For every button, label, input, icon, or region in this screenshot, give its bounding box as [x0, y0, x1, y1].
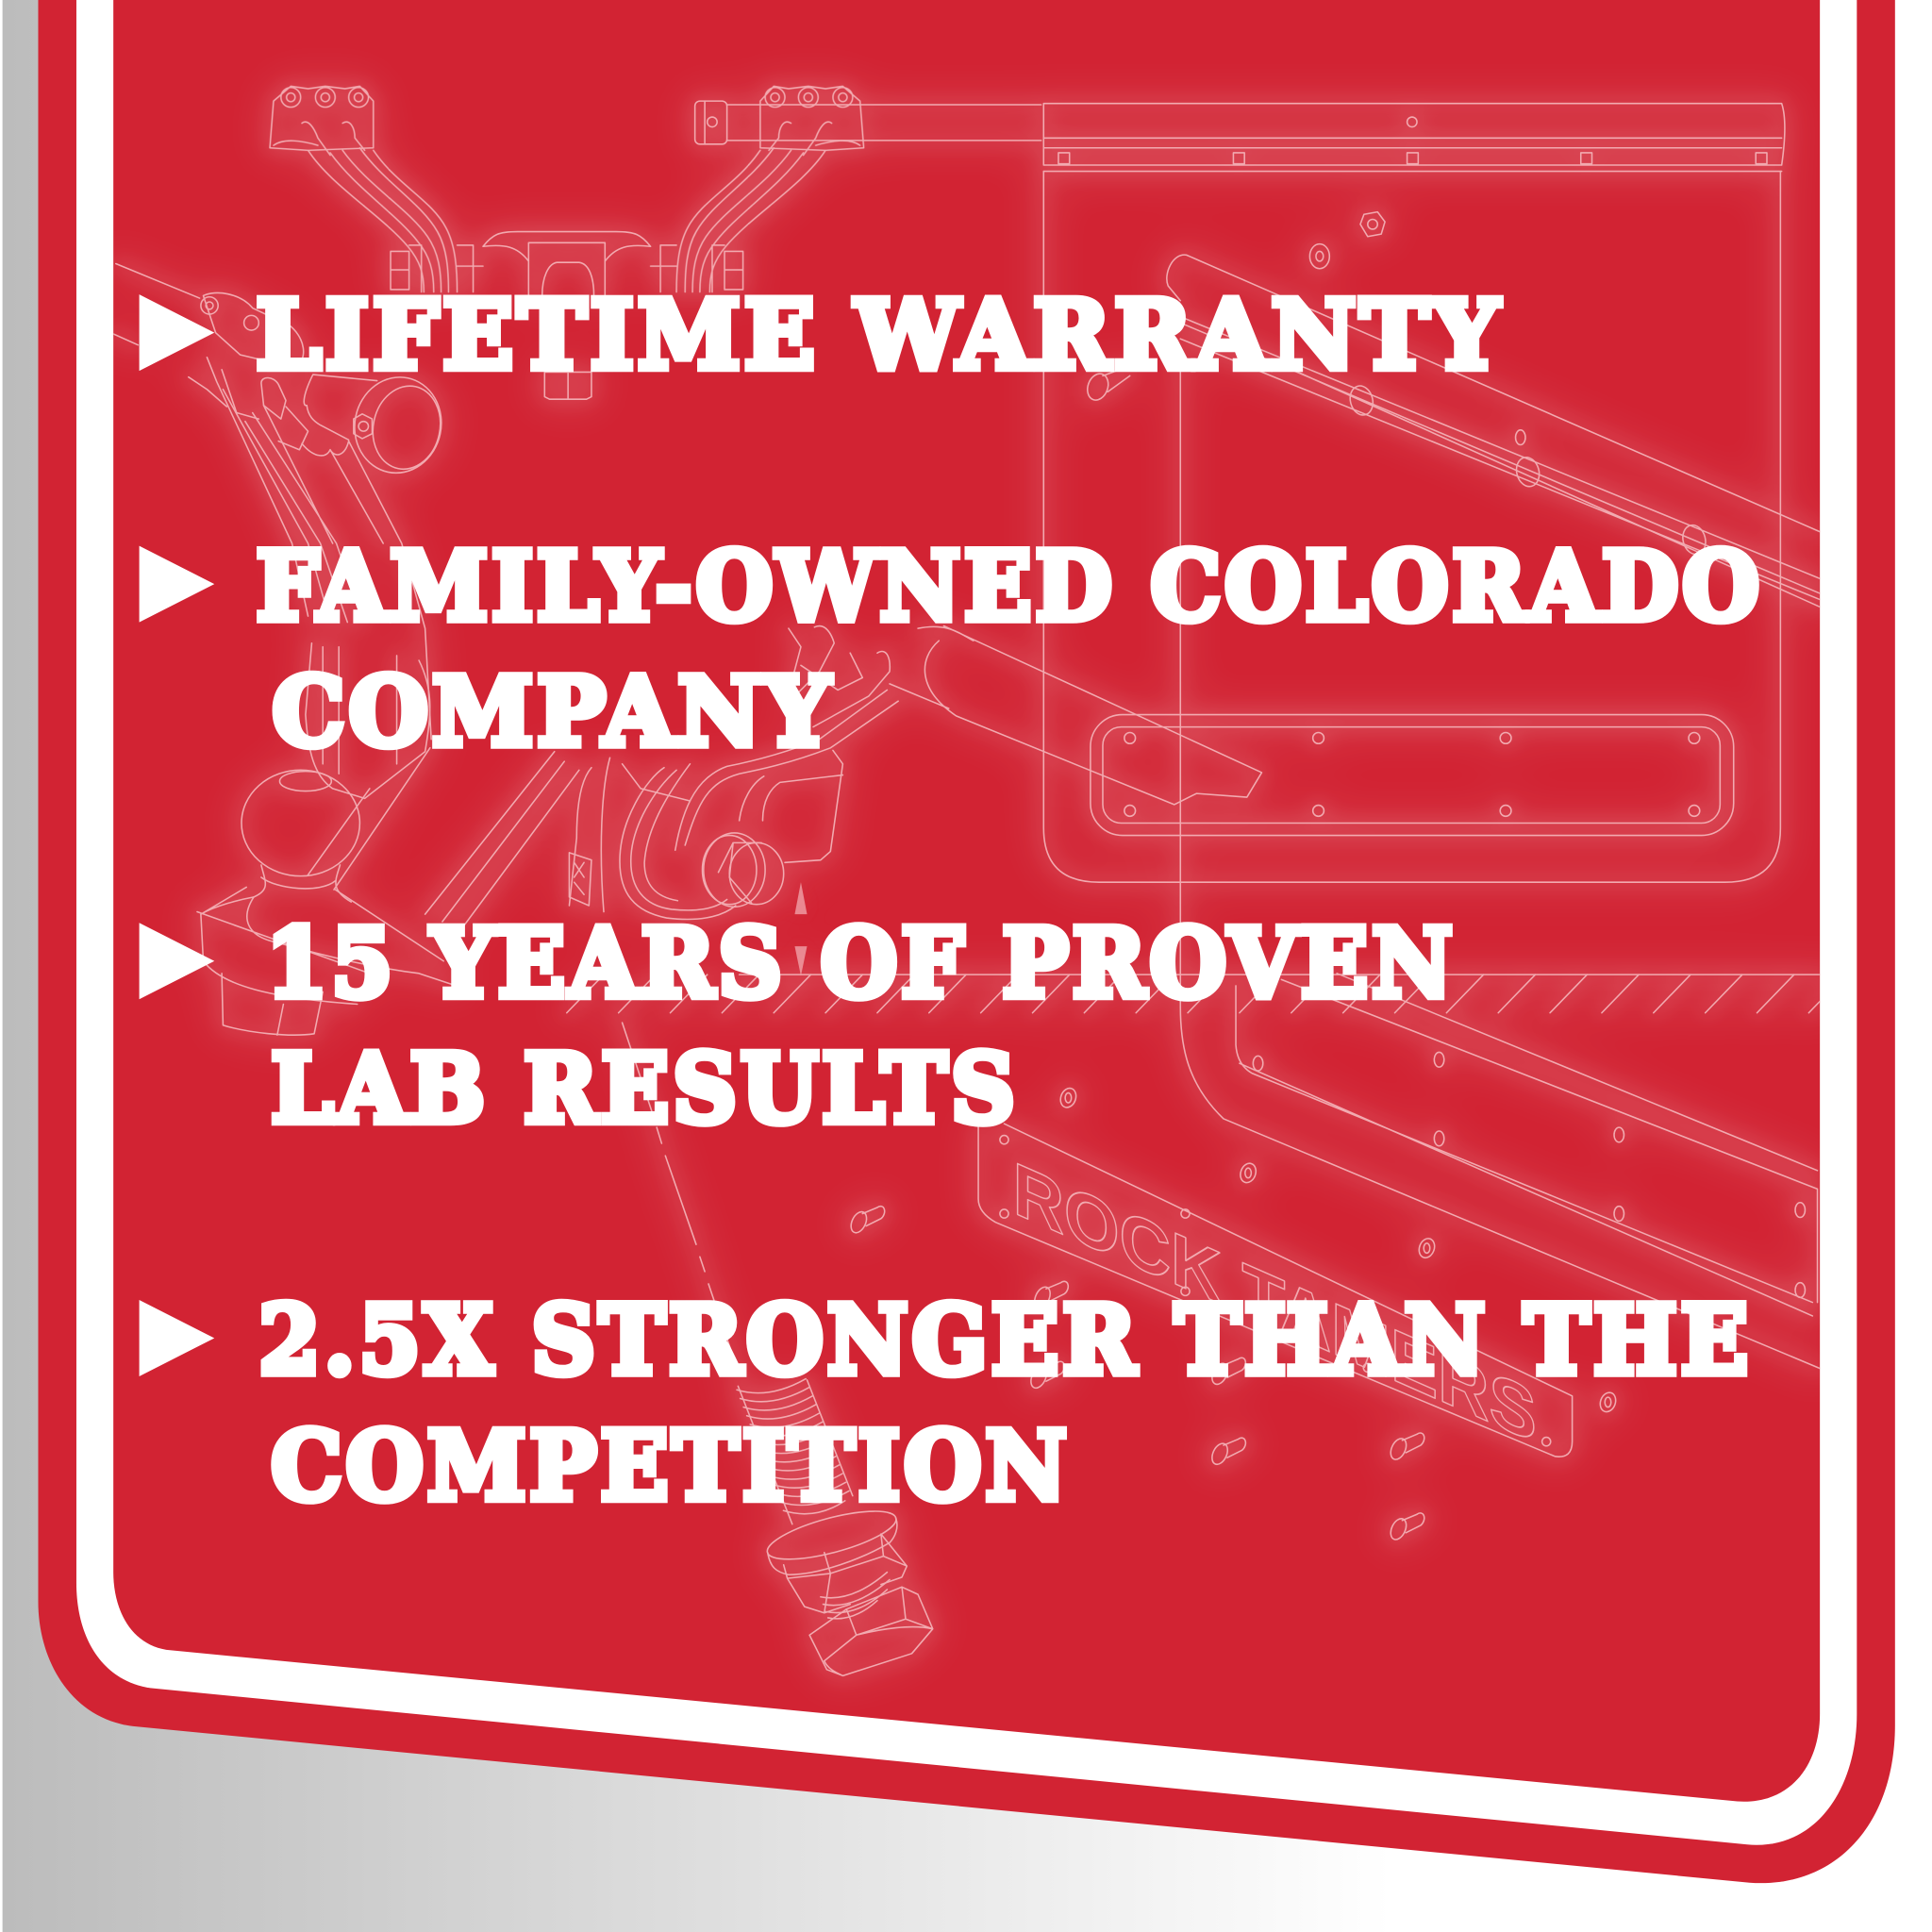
mud flap perspective view [1180, 974, 1821, 1369]
left hitch arm and barrel [113, 264, 450, 890]
centre hub and bracket [425, 626, 1261, 926]
feature: 15 years of proven lab results: LAB RESULTS [271, 1033, 1019, 1144]
loose screws and washers [848, 1086, 1618, 1542]
ground line with hatching [567, 974, 1846, 1013]
bullet arrow 4 [140, 1300, 214, 1376]
threaded bolt with nuts [623, 1023, 933, 1675]
bullet arrow 2 [140, 546, 214, 623]
mud flap upper view [1043, 104, 1785, 1007]
feature: lifetime warranty: LIFETIME WARRANTY [257, 279, 1503, 391]
long tube upper right [1084, 212, 1821, 608]
feature: 15 years of proven lab results [266, 908, 1457, 1144]
feature: family-owned colorado company [257, 530, 1763, 768]
feature: family-owned colorado company: FAMILY-OWNED COLORADO [257, 530, 1763, 641]
feature: 15 years of proven lab results: 15 YEARS OF PROVEN [266, 908, 1457, 1019]
feature: 2.5x stronger than the competition [258, 1285, 1752, 1522]
small logo on hub [569, 853, 591, 906]
top hitch mount [270, 86, 1041, 399]
technical blueprint drawing [113, 86, 1846, 1675]
bullet arrow 1 [140, 294, 214, 371]
feature: 2.5x stronger than the competition: COMPETITION [271, 1410, 1071, 1522]
feature: 2.5x stronger than the competition: 2.5X STRONGER THAN THE [258, 1285, 1752, 1396]
Rock Tamers plate: ROCK TAMERS [1013, 1147, 1537, 1459]
bullet arrow 3 [140, 923, 214, 999]
feature: family-owned colorado company: COMPANY [273, 657, 834, 768]
tow ball [197, 770, 456, 1035]
alignment arrows [794, 882, 808, 975]
